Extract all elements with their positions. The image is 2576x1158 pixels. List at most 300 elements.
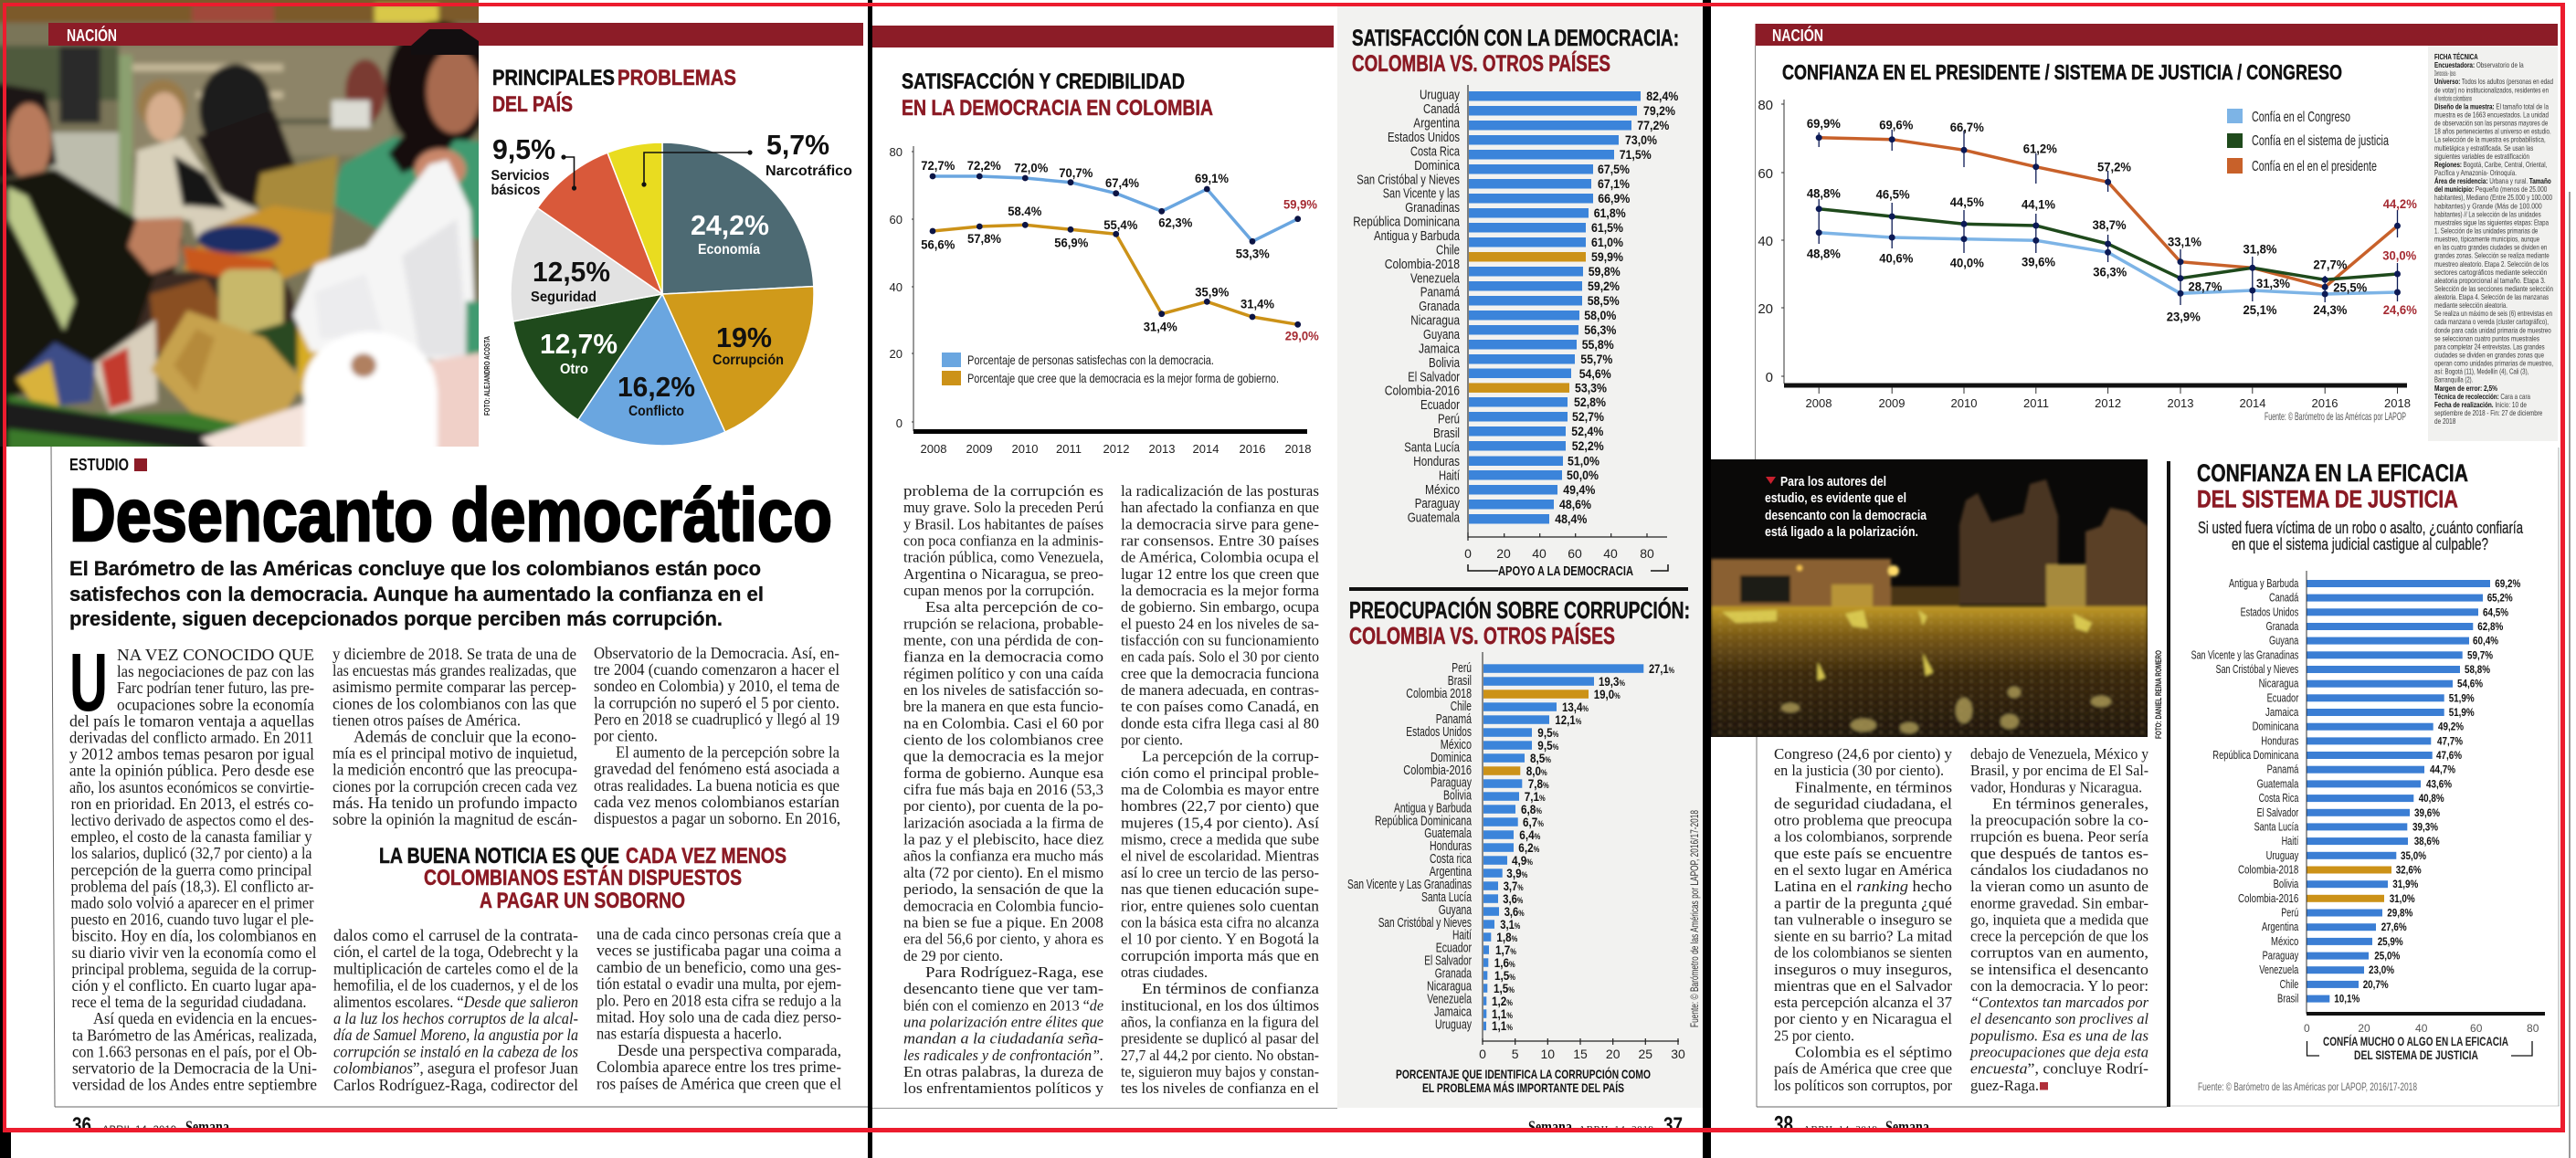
values: 29,8%: [2387, 908, 2412, 919]
article text column 3 bottom, page 36: nas estaría dispuesta a hacerlo.: [596, 1025, 782, 1043]
line chart: satisfacción y credibilidad: 2012: [1103, 442, 1129, 456]
article text column 3 top, page 36: tre 2004 (cuando comenzaron a hacer el: [594, 660, 839, 679]
article text column 2, page 37: el puesto 24 en los niveles de sa-: [1121, 615, 1319, 632]
country labels: Paraguay: [1415, 496, 1460, 511]
line chart: confianza en presidente, justicia y congreso: 0: [1766, 370, 1773, 385]
values: 55,7%: [1580, 352, 1613, 366]
country labels: Costa Rica: [1410, 143, 1460, 159]
values: [1492, 661, 1674, 1033]
values: 23,0%: [2369, 965, 2394, 976]
country labels: San Vicente y Las Granadinas: [1347, 877, 1472, 892]
heading: principales problemas: DEL PAÍS: [492, 91, 573, 117]
line chart: satisfacción y credibilidad: 31,4%: [1240, 296, 1275, 311]
values: 19,0%: [1594, 687, 1621, 701]
article text column 3 top, page 36: El aumento de la percepción sobre la: [616, 743, 839, 762]
line chart: satisfacción y credibilidad: 69,1%: [1195, 171, 1230, 185]
line chart: satisfacción y credibilidad: 20: [890, 347, 903, 361]
line chart: confianza en presidente, justicia y congreso: [1758, 98, 2417, 423]
article text column 1, page 36: ocupaciones sobre la economía: [117, 695, 314, 713]
line chart: satisfacción y credibilidad: 67,4%: [1105, 175, 1140, 190]
article text column 1, page 37: en los niveles de satisfacción so-: [903, 681, 1103, 699]
values: 35,0%: [2401, 851, 2426, 862]
values: 3,7%: [1504, 879, 1524, 893]
footer: page 36: 36: [72, 1113, 91, 1138]
line chart: satisfacción y credibilidad: 2013: [1149, 442, 1175, 456]
values: 49,2%: [2438, 722, 2464, 733]
article text column 1, page 36: año, los asuntos económicos se convirtie-: [69, 778, 314, 796]
values: 62,8%: [2477, 622, 2503, 633]
article text column 2 top, page 36: y diciembre de 2018. Se trata de una de: [333, 645, 576, 663]
values: 61,5%: [1591, 220, 1623, 235]
values: 43,6%: [2426, 779, 2452, 790]
country labels: Guatemala: [1408, 511, 1461, 526]
values: 1,6%: [1494, 955, 1515, 970]
article text column 1, page 38: tan vulnerable o inseguro se: [1774, 911, 1952, 928]
photo credit: FOTO: ALEJANDRO ACOSTA: [482, 336, 491, 416]
footer: page 37: ABRIL 14, 2019: [1578, 1124, 1653, 1135]
data labels: 40,0%: [1950, 256, 1984, 270]
data labels: 27,7%: [2313, 258, 2348, 272]
article text column 2, page 38: encuesta”, concluye Rodrí-: [1970, 1060, 2148, 1078]
article text column 3 top, page 36: la corrupción no superó el 5 por ciento.: [594, 693, 839, 711]
line chart: satisfacción y credibilidad: 59,9%: [1283, 196, 1318, 211]
article text column 1, page 37: democracia en Colombia funcio-: [903, 897, 1103, 914]
values: 3,6%: [1504, 904, 1525, 919]
values: 52,8%: [1574, 395, 1606, 409]
technical sheet: de 2018: [2434, 416, 2455, 426]
article text column 1, page 38: [1774, 745, 1952, 1094]
article text column 1, page 38: de los colombianos se sienten: [1774, 944, 1952, 962]
line chart: satisfacción y credibilidad: 35,9%: [1195, 284, 1230, 299]
technical sheet: muestreo, típicamente municipios, aunque: [2434, 234, 2539, 243]
line chart: satisfacción y credibilidad: 2008: [921, 442, 946, 456]
bars: [1483, 664, 1643, 1030]
footer: page 38: ABRIL 14, 2019: [1803, 1124, 1878, 1135]
article text column 2, page 37: rar consensos. Entre 30 países: [1121, 532, 1319, 550]
country labels: México: [1425, 482, 1460, 498]
article text column 1, page 37: régimen político y con una caída: [903, 665, 1103, 682]
pie chart: principales problemas del país: 12,5%: [533, 256, 610, 288]
country labels: Granada: [2266, 620, 2298, 633]
country labels: Brasil: [1433, 426, 1460, 441]
line chart: confianza en presidente, justicia y congreso: 2011: [2023, 396, 2049, 410]
values: [1555, 89, 1679, 526]
article text column 3 top, page 36: sondeo en Colombia) y 2010, el tema de: [594, 677, 839, 696]
data labels: 23,9%: [2167, 310, 2201, 324]
country labels: Santa Lucía: [1421, 890, 1472, 905]
country labels: Guatemala: [2257, 777, 2298, 790]
country labels: Jamaica: [1419, 342, 1461, 356]
article text column 1, page 37: [903, 482, 1104, 1097]
article text column 1, page 38: otro problema que preocupa: [1774, 812, 1952, 829]
article text column 2, page 37: mismo, crece a medida que sube: [1121, 831, 1319, 848]
country labels: Haití: [1439, 468, 1461, 483]
values: 52,4%: [1571, 424, 1604, 438]
country labels: Perú: [2281, 906, 2298, 919]
article text column 1, page 37: cifra fue más baja en 2016 (53,3: [903, 781, 1103, 798]
x axis: DEL SISTEMA DE JUSTICIA: [2354, 1047, 2478, 1062]
article text column 2, page 37: corrupción importa más que en: [1121, 947, 1319, 964]
article text column 3 bottom, page 36: Colombia aparece entre los tres prime-: [596, 1058, 841, 1076]
country labels: Uruguay: [2266, 849, 2299, 862]
article text column 3 top, page 36: gravedad del fenómeno está asociada a: [594, 760, 839, 778]
article text column 2 top, page 36: más. Ha tenido un profundo impacto: [333, 794, 577, 812]
values: 60,4%: [2473, 637, 2498, 647]
values: 67,1%: [1598, 176, 1630, 191]
data labels: 57,2%: [2097, 159, 2132, 174]
country labels: Canadá: [2269, 592, 2298, 605]
article text column 1, page 37: periodo, la sensación de que la: [903, 880, 1103, 898]
article text column 1, page 37: de 29 por ciento.: [903, 947, 1003, 964]
photo credit: FOTO: DANIEL REINA ROMERO: [2154, 650, 2163, 739]
article text column 3 bottom, page 36: Desde una perspectiva comparada,: [618, 1041, 841, 1059]
values: 25,9%: [2378, 937, 2403, 948]
line chart: confianza en presidente, justicia y congreso: 2016: [2312, 396, 2338, 410]
article text column 2 bottom, page 36: ción, el cartel de la toga, Odebrecht y la: [333, 942, 578, 961]
technical sheet: 1. Selección de las unidades primarias de: [2434, 226, 2538, 236]
article text column 1, page 37: años la confianza era mucho más: [903, 847, 1103, 865]
article text column 2, page 38: go, inquieta que a medida que: [1970, 911, 2148, 928]
country labels: México: [1441, 737, 1472, 753]
x axis: 25: [1639, 1047, 1652, 1061]
country labels: Santa Lucía: [1404, 440, 1460, 455]
article text column 1, page 38: a los colombianos, sorprende: [1774, 828, 1952, 846]
values: 39,6%: [2414, 808, 2440, 819]
country labels: Haití: [1452, 928, 1473, 943]
article text column 2 top, page 36: asimismo permite comparar las percep-: [333, 678, 576, 696]
country labels: Honduras: [2261, 734, 2298, 747]
country labels: Dominica: [1414, 158, 1461, 174]
article text column 3 top, page 36: Observatorio de la Democracia. Así, en-: [594, 644, 839, 662]
data labels: 69,9%: [1807, 116, 1841, 131]
article text column 1, page 37: tración pública, como Venezuela,: [903, 549, 1103, 566]
country labels: El Salvador: [1408, 369, 1460, 384]
pie chart: principales problemas del país: 12,7%: [540, 328, 618, 360]
values: 6,4%: [1519, 827, 1540, 842]
photo: supermarket checkout: [0, 0, 491, 457]
article text column 1, page 36: del país le tomaron ventaja a aquellas: [69, 711, 314, 730]
country labels: República Dominicana: [2212, 749, 2298, 762]
header band: page 38: [1756, 24, 2558, 46]
values: 8,5%: [1530, 751, 1551, 765]
article text column 2, page 37: años, la confianza en la figura del: [1121, 1013, 1319, 1030]
article text column 2, page 38: “Contextos tan marcados por: [1970, 994, 2148, 1011]
article text column 2 bottom, page 36: día de Samuel Moreno, la angustia por la: [333, 1026, 578, 1044]
pie chart: principales problemas del país: 9,5%: [492, 133, 555, 165]
values: 39,3%: [2412, 822, 2438, 833]
main title: Desencanto democrático: [69, 474, 832, 557]
country labels: Guyana: [2269, 635, 2298, 647]
article text column 1, page 37: con poca confianza en la adminis-: [903, 532, 1103, 550]
values: 59,2%: [1588, 279, 1620, 293]
article text column 1, page 37: problema de la corrupción es: [903, 482, 1103, 500]
footer: page 37: Semana: [1528, 1118, 1572, 1137]
country labels: Perú: [1452, 660, 1472, 676]
country labels: Chile: [2280, 978, 2298, 991]
article text column 2 top, page 36: mía es el principal motivo de inquietud,: [333, 744, 577, 763]
article text column 2, page 37: cree que la democracia funciona: [1121, 665, 1319, 682]
data labels: 48,8%: [1807, 186, 1841, 201]
heading: satisfacción y credibilidad: SATISFACCIÓN Y CREDIBILIDAD: [902, 68, 1185, 94]
article text column 2, page 37: presidente se duplicó al pasar del: [1121, 1030, 1319, 1047]
article text column 1, page 36: biscito. Hoy en día, los colombianos en: [71, 927, 316, 945]
source: Fuente: © Barómetro de las Américas por LAPOP: [2265, 410, 2406, 423]
technical sheet: Área de residencia: Urbana y rural. Tamaño: [2434, 176, 2551, 185]
data labels: [1807, 116, 2417, 324]
article text column 3 bottom, page 36: veces se justificaba pagar una coima a: [596, 942, 841, 960]
line chart: satisfacción y credibilidad: 40: [890, 280, 903, 294]
x axis: 20: [2358, 1022, 2370, 1035]
values: 1,1%: [1492, 1018, 1513, 1033]
article text column 3 bottom, page 36: [596, 924, 841, 1092]
article text column 2, page 37: con la básica esta cifra no alcanza: [1121, 913, 1319, 931]
technical sheet: Democracia - Ipsos: [2434, 68, 2455, 78]
values: 20,7%: [2363, 980, 2389, 991]
line chart: satisfacción y credibilidad: 29,0%: [1285, 328, 1319, 342]
values: 31,0%: [2390, 894, 2415, 905]
values: 82,4%: [1646, 89, 1679, 103]
country labels: Argentina: [1430, 864, 1472, 879]
values: 51,0%: [1568, 453, 1599, 468]
photo caption: Para los autores del: [1780, 474, 1886, 490]
article text column 1, page 36: problema del país (18,3). El conflicto ar-: [71, 877, 314, 896]
data labels: 44,2%: [2383, 196, 2417, 211]
country labels: Colombia-2016: [1385, 384, 1460, 399]
data labels: 44,1%: [2022, 197, 2056, 212]
article text column 2, page 37: te con países como Canadá, en: [1121, 698, 1320, 715]
article text column 1, page 38: Congreso (24,6 por ciento) y: [1774, 745, 1952, 763]
article text column 1, page 38: Colombia es el séptimo: [1795, 1043, 1952, 1061]
article text column 3 top, page 36: otras realidades. La buena noticia es que: [594, 776, 839, 795]
country labels: Panamá: [2267, 763, 2298, 776]
article text column 1, page 38: esta percepción alcanza el 37: [1774, 994, 1952, 1011]
article text column 2, page 38: debajo de Venezuela, México y: [1970, 745, 2148, 763]
country labels: San Cristóbal y Nieves: [2216, 663, 2298, 676]
values: 69,2%: [2495, 579, 2520, 590]
country labels: Colombia 2018: [1406, 686, 1472, 701]
article text column 2, page 37: nas que tienen educación supe-: [1121, 880, 1319, 898]
section label: NACIÓN: [1772, 26, 1823, 45]
article text column 1, page 37: alta (72 por ciento). En el mismo: [903, 864, 1103, 881]
article text column 2, page 38: con la democracia. Y lo peor:: [1970, 977, 2148, 995]
line chart: satisfacción y credibilidad: 57,8%: [967, 231, 1002, 246]
country labels: República Dominicana: [1353, 215, 1461, 230]
country labels: Ecuador: [2267, 691, 2298, 704]
article text column 1, page 36: y 2012 ambos temas pesaron por igual: [69, 745, 314, 763]
line chart: confianza en presidente, justicia y congreso: 2009: [1879, 396, 1905, 410]
article text column 1, page 36: percepción de la guerra como principal: [71, 860, 312, 879]
values: 54,6%: [2457, 679, 2483, 690]
pie chart: principales problemas del país: 24,2%: [691, 209, 769, 241]
article text column 2, page 38: la vieran como un asunto de: [1970, 878, 2148, 895]
country labels: San Vicente y las Granadinas: [2191, 648, 2298, 661]
article text column 2 top, page 36: las encuestas más grandes realizadas, que: [333, 661, 576, 679]
technical sheet: siguientes variables de estratificación: [2434, 152, 2529, 161]
values: 59,8%: [1589, 264, 1621, 279]
country labels: Chile: [1436, 242, 1460, 258]
country labels: Bolivia: [2274, 878, 2298, 890]
technical sheet: FICHA TÉCNICA: [2434, 52, 2478, 61]
article text column 2, page 37: en cada país. Solo el 30 por ciento: [1121, 648, 1319, 666]
pull quote: COLOMBIANOS ESTÁN DISPUESTOS: [424, 865, 742, 890]
pull quote: LA BUENA NOTICIA ES QUE: [379, 844, 619, 868]
values: 47,7%: [2437, 736, 2463, 747]
technical sheet: mediante selección aleatoria.: [2434, 300, 2507, 310]
country labels: Panamá: [1436, 711, 1472, 727]
values: 13,4%: [1562, 700, 1589, 714]
photo caption: [1765, 474, 1927, 540]
data labels: 31,8%: [2243, 241, 2277, 256]
country labels: Ecuador: [1420, 397, 1460, 413]
technical sheet: septiembre de 2018 - Fin: 27 de diciembre: [2434, 408, 2542, 417]
x axis: 60: [1568, 546, 1582, 561]
values: 48,4%: [1555, 511, 1588, 526]
article text column 2, page 37: mujeres (15,4 por ciento). Así: [1121, 814, 1319, 831]
article text column 2, page 37: tisfacción con su funcionamiento: [1121, 632, 1319, 648]
line chart: confianza en presidente, justicia y congreso: 60: [1758, 166, 1773, 182]
article text column 1, page 38: país de América que cree que: [1774, 1060, 1952, 1078]
source: Fuente: © Barómetro de las Américas por LAPOP, 2016/17-2018: [2198, 1080, 2417, 1093]
data labels: 24,3%: [2313, 302, 2348, 317]
line chart: satisfacción y credibilidad: 31,4%: [1144, 320, 1177, 334]
article text column 1, page 36: [69, 646, 317, 1094]
values: 51,9%: [2449, 708, 2475, 719]
article text column 2 top, page 36: Además de concluir que la econo-: [354, 727, 576, 745]
footer: page 36: [72, 1113, 229, 1138]
x axis: 60: [2470, 1022, 2483, 1035]
data labels: 24,6%: [2383, 302, 2417, 317]
article text column 1, page 36: derivadas del conflicto armado. En 2011: [69, 729, 313, 747]
page gutter bands: [0, 0, 1711, 1158]
values: 58,0%: [1584, 308, 1617, 322]
country labels: Venezuela: [2259, 963, 2298, 976]
article text column 3 bottom, page 36: una de cada cinco personas creía que a: [596, 924, 841, 942]
photo caption: desencanto con la democracia: [1765, 508, 1927, 523]
technical sheet: sectores cartográficos mediante selección: [2434, 268, 2548, 277]
header band: page 36: [48, 23, 863, 46]
article text column 1, page 37: mente, con una pérdida de con-: [903, 632, 1103, 648]
article text column 2 top, page 36: ciones de los colombianos con las que: [333, 694, 576, 712]
article text column 1, page 37: fianza en la democracia como: [903, 648, 1103, 666]
line chart: satisfacción y credibilidad: 72,2%: [967, 158, 1001, 173]
data labels: 31,3%: [2256, 276, 2291, 290]
values: 44,7%: [2430, 765, 2455, 776]
line chart: satisfacción y credibilidad: 2010: [1012, 442, 1038, 456]
pie chart: principales problemas del país: Corrupción: [713, 353, 784, 368]
technical sheet: Barranquilla (2).: [2434, 375, 2473, 384]
line chart: confianza en presidente, justicia y congreso: 2012: [2095, 396, 2121, 410]
technical sheet: se seleccionan cuatro puntos muestrales: [2434, 333, 2539, 342]
article text column 2, page 38: corruptos van en aumento,: [1970, 944, 2148, 962]
values: 1,7%: [1495, 942, 1516, 957]
panel: gray background of the technical sheet: [2428, 46, 2558, 441]
article text column 2 top, page 36: [333, 645, 577, 828]
article text column 2, page 38: En términos generales,: [1992, 795, 2148, 812]
article text column 1, page 36: las negociaciones de paz con las: [117, 662, 314, 680]
article text column 2, page 38: guez-Raga.: [1970, 1077, 2039, 1094]
footer: page 37: 37: [1663, 1113, 1683, 1138]
values: 31,9%: [2392, 879, 2418, 890]
article text column 3 bottom, page 36: tión estatal o evadir una multa, por ejem-: [596, 974, 841, 993]
values: 49,4%: [1563, 482, 1596, 497]
article text column 2, page 37: te, siguieron muy bajos y constan-: [1121, 1063, 1319, 1080]
x axis: 5: [1512, 1047, 1519, 1061]
country labels: Ecuador: [1436, 941, 1472, 956]
article text column 2, page 37: de gobierno. Sin embargo, ocupa: [1121, 598, 1319, 616]
x axis: PORCENTAJE QUE IDENTIFICA LA CORRUPCIÓN COMO: [1396, 1066, 1651, 1081]
article text column 1, page 37: que la democracia es la mejor: [903, 748, 1103, 765]
country labels: Colombia-2016: [1403, 763, 1472, 778]
heading: principales problemas: [492, 66, 736, 117]
article text column 1, page 38: 25 por ciento.: [1774, 1026, 1854, 1044]
subheading: El Barómetro de las Américas concluye que los colombianos están poco: [69, 557, 761, 580]
panel: gray background of the comparison charts: [1337, 6, 1703, 1108]
values: 27,1%: [1649, 661, 1674, 676]
values: 79,2%: [1643, 103, 1675, 118]
values: 32,6%: [2396, 866, 2422, 877]
x axis: 0: [2304, 1022, 2310, 1035]
data labels: 66,7%: [1950, 120, 1984, 134]
subheading: presidente, siguen decepcionados porque perciben más corrupción.: [69, 607, 723, 630]
values: 61,0%: [1591, 235, 1623, 249]
values: 66,9%: [1598, 191, 1631, 205]
values: 55,8%: [1582, 337, 1614, 352]
article text column 2 top, page 36: ciones por la corrupción crecen cada vez: [333, 777, 577, 795]
source: comparison charts: Fuente: © Barómetro de las Américas por LAPOP, 2016/17-2018: [1688, 810, 1701, 1027]
data labels: 25,5%: [2333, 279, 2368, 294]
country labels: Perú: [1438, 412, 1460, 427]
values: 8,0%: [1526, 763, 1547, 778]
footer: page 38: [1774, 1111, 1929, 1138]
x axis: 0: [1464, 546, 1472, 561]
line chart: confianza en presidente, justicia y congreso: 2008: [1806, 396, 1832, 410]
pull quote: A PAGAR UN SOBORNO: [480, 889, 685, 913]
article text column 2, page 38: el desencanto son proclives al: [1970, 1010, 2148, 1027]
x axis: CONFÍA MUCHO O ALGO EN LA EFICACIA: [2323, 1034, 2508, 1048]
technical sheet: Regiones: Bogotá, Caribe, Central, Oriental,: [2434, 160, 2547, 169]
article text column 1, page 37: bién con el comienzo en 2013 “de: [903, 996, 1103, 1014]
article text column 1, page 36: con 1.663 personas en el país, por el Ob-: [72, 1042, 317, 1060]
article text column 1, page 38: siente en su barrio? La mitad: [1774, 928, 1952, 944]
values: 58,5%: [1588, 293, 1620, 308]
bar chart: confianza en la eficacia del sistema de justicia: [2191, 571, 2545, 1093]
divider rule beside the justice chart: [2167, 461, 2170, 1107]
article text column 1, page 38: en la justicia (30 por ciento).: [1774, 762, 1944, 779]
pie chart: principales problemas del país: Economía: [698, 242, 760, 258]
footer: page 36: ABRIL 14, 2019: [102, 1124, 176, 1135]
article text column 1, page 36: principal problema, seguida de la corrup-: [71, 960, 317, 978]
bars: [1469, 91, 1641, 524]
country labels: Nicaragua: [2259, 678, 2298, 690]
header band: page 37: [872, 26, 1334, 47]
data labels: 46,5%: [1876, 187, 1910, 202]
technical sheet: del municipio: Pequeño (menos de 25.000: [2434, 184, 2547, 194]
country labels: Venezuela: [1410, 270, 1460, 286]
data labels: 61,2%: [2023, 141, 2057, 155]
article text column 1, page 37: forma de gobierno. Aunque esa: [903, 764, 1103, 782]
pie chart: principales problemas del país: básicos: [491, 183, 541, 198]
article text column 1, page 37: Esa alta percepción de co-: [925, 598, 1103, 616]
article text column 2, page 38: populismo. Esa es una de las: [1969, 1026, 2148, 1044]
article text column 2 bottom, page 36: hemofilia, el de los cuadernos, y el de los: [333, 976, 578, 995]
article text column 1, page 38: Finalmente, en términos: [1795, 778, 1952, 795]
country labels: Antigua y Barbuda: [1374, 228, 1460, 244]
data labels: 25,1%: [2243, 302, 2277, 317]
article text column 3 top, page 36: cada vez menos colombianos estarían: [594, 793, 839, 811]
country labels: Guyana: [1439, 902, 1472, 918]
country labels: Canadá: [1423, 101, 1460, 117]
article text column 2, page 37: el 10 por ciento. Y en Bogotá la: [1121, 931, 1319, 948]
